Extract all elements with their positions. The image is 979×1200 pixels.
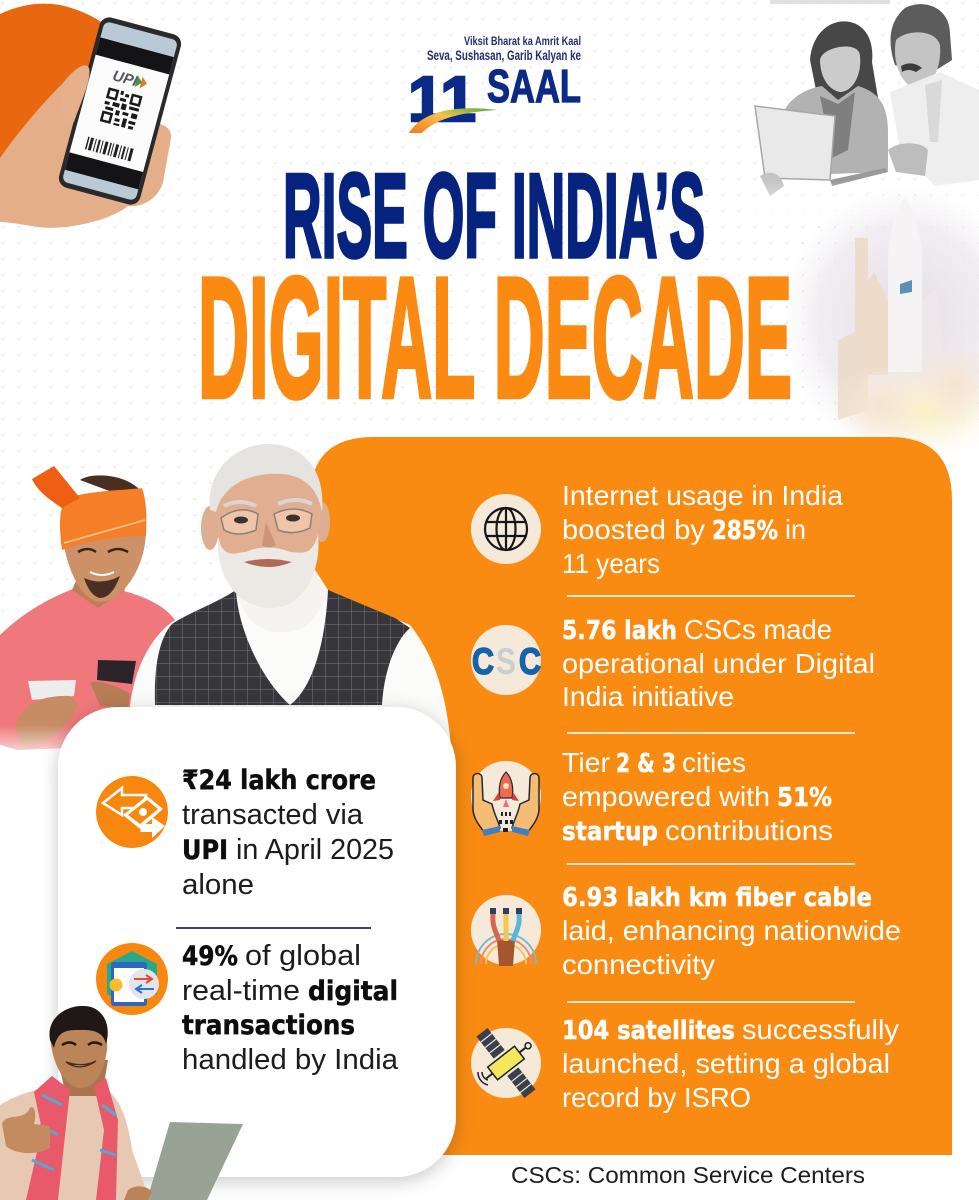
icon: startup rocket and hands [471, 761, 541, 836]
illustration: man in orange turban with phones [0, 466, 180, 765]
text: tier 2 and 3 cities: empowered with [562, 781, 770, 812]
laptop [755, 106, 835, 180]
text: fiber cable: 6.93 lakh km fiber cable [562, 883, 872, 913]
icon: digital transactions phone [96, 943, 168, 1015]
text: 24 lakh crore: transacted via [182, 799, 363, 831]
text: satellites: launched, setting a global [562, 1048, 890, 1079]
vest [155, 590, 410, 705]
barcode [85, 137, 134, 161]
icon: CSC logo: C [519, 641, 541, 682]
text: satellites [562, 1014, 899, 1113]
text: fiber cable [562, 883, 901, 980]
logo: 11 Saal: 11 [408, 63, 476, 135]
neck and collar [236, 562, 328, 632]
text: 49 percent global: 49% [182, 941, 238, 972]
text: CSCs: operational under Digital [562, 648, 875, 679]
illustration: Prime Minister portrait [130, 444, 452, 760]
text: 24 lakh crore [182, 765, 394, 901]
text: internet usage [562, 480, 844, 579]
text: CSCs [562, 614, 875, 712]
thumb over phone edge [62, 66, 89, 126]
text: CSCs: CSCs made [684, 614, 832, 645]
text: tier 2 and 3 cities: 2 & 3 [616, 749, 676, 779]
hand [0, 65, 171, 228]
white kurta [130, 580, 452, 760]
orange blob [0, 4, 114, 170]
text: tier 2 and 3 cities: cities [682, 747, 746, 778]
hair [210, 444, 322, 512]
logo: 11 Saal: SAAL [487, 60, 581, 112]
text: 24 lakh crore: UPI [182, 835, 228, 866]
eyes and glasses [221, 509, 312, 534]
icon: CSC logo: S [496, 641, 516, 682]
text: satellites: 104 satellites [562, 1016, 735, 1046]
text: internet usage: 285% [712, 516, 778, 546]
logo: 11 Saal: Viksit Bharat ka Amrit Kaal [464, 36, 581, 48]
phone in hand [97, 660, 136, 684]
phone [57, 15, 183, 207]
laptop [147, 1122, 243, 1200]
text: CSCs: India initiative [562, 681, 734, 712]
illustration: man with laptop giving thumbs up [0, 1006, 243, 1200]
text: internet usage: Internet usage in India [562, 480, 844, 511]
text: tier 2 and 3 cities: contributions [665, 815, 833, 846]
text: satellites: successfully [742, 1014, 899, 1045]
text: 49 percent global: transactions [182, 1010, 355, 1041]
illustration: hand holding UPI phone [0, 4, 183, 228]
text: internet usage: in [785, 514, 806, 545]
icon: satellite [462, 1013, 554, 1109]
title [198, 149, 792, 434]
text: 24 lakh crore: alone [182, 869, 254, 901]
text: satellites: record by ISRO [562, 1082, 751, 1113]
QR code [100, 87, 143, 130]
background dot pattern [0, 0, 979, 720]
card: UPI stats [58, 707, 456, 1177]
text: 49 percent global [182, 940, 398, 1076]
text: CSCs: 5.76 lakh [562, 616, 677, 646]
text: internet usage: 11 years [562, 548, 660, 579]
icons: orange panel circles [462, 494, 554, 1109]
text: 49 percent global: handled by India [182, 1044, 398, 1076]
icon: globe [471, 494, 541, 564]
text: tier 2 and 3 cities: Tier [562, 747, 610, 778]
footnote: CSCs: Common Service Centers [511, 1162, 865, 1188]
text: 24 lakh crore: in April 2025 [236, 834, 394, 866]
beard [218, 534, 319, 608]
woman [810, 21, 880, 148]
icon: CSC logo: C [472, 641, 494, 682]
text: tier 2 and 3 cities: 51% [777, 783, 832, 813]
icon: CSC logo [471, 625, 541, 695]
face [214, 458, 320, 580]
text: tier 2 and 3 cities: startup [562, 817, 658, 847]
man [891, 4, 952, 74]
illustration: couple with laptop (greyscale) [750, 0, 979, 225]
text: fiber cable: connectivity [562, 949, 715, 980]
logo: 11 Saal: Seva, Sushasan, Garib Kalyan ke [427, 48, 581, 63]
UPI logo text: UPI [111, 67, 140, 90]
icon: fiber cable [471, 895, 541, 966]
illustration: rocket launch [780, 185, 979, 460]
logo: 11 Saal [408, 36, 581, 135]
text: fiber cable: laid, enhancing nationwide [562, 915, 901, 946]
icon: money transfer arrows [96, 776, 168, 848]
text: 49 percent global: of global [245, 940, 361, 972]
ears [201, 506, 219, 550]
text: tier 2 and 3 cities [562, 747, 833, 847]
text: 24 lakh crore: ₹24 lakh crore [182, 765, 376, 796]
text: internet usage: boosted by [562, 514, 705, 545]
text: 49 percent global: real-time [182, 975, 300, 1007]
panel: orange stats [310, 437, 952, 1155]
text: 49 percent global: digital [308, 976, 398, 1007]
